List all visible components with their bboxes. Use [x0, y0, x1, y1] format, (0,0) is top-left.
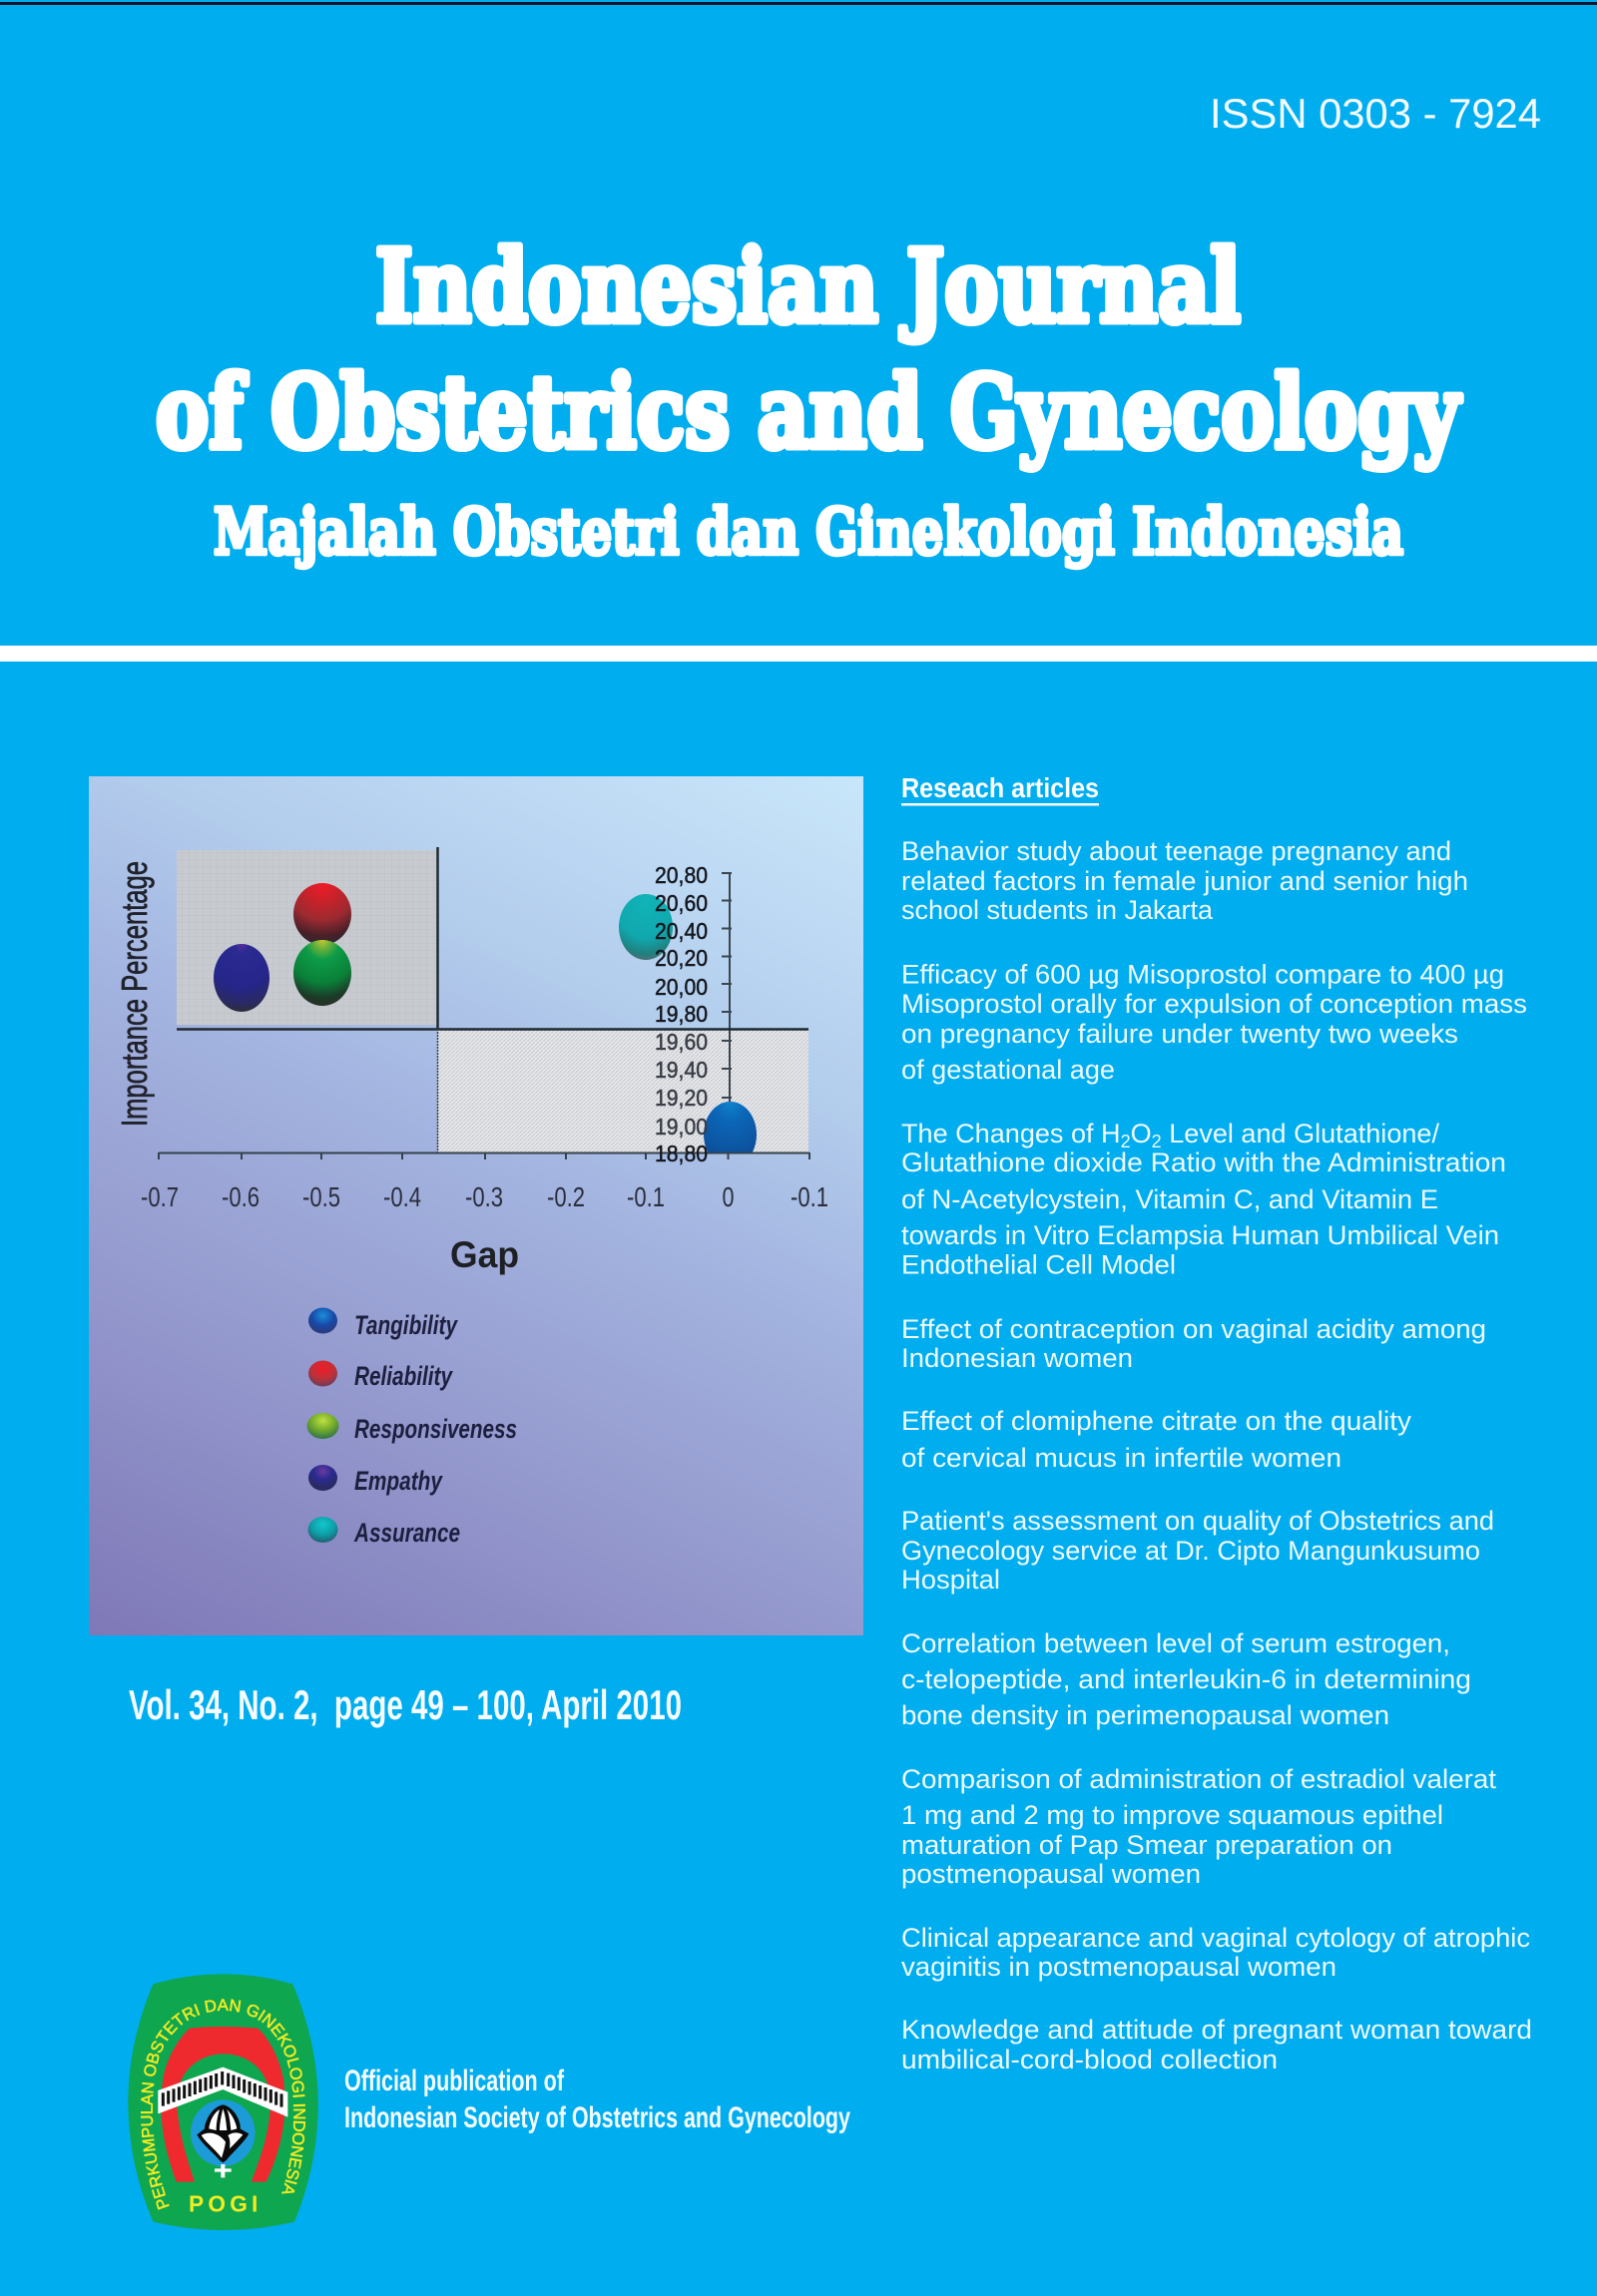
- x axis labels: -0.6: [222, 1181, 260, 1212]
- logo roof: [158, 2067, 287, 2117]
- article 6: Gynecology service at Dr. Cipto Mangunkusumo: [901, 1536, 1480, 1566]
- legend: assurance: Assurance: [353, 1518, 460, 1548]
- article 2: on pregnancy failure under twenty two weeks: [901, 1019, 1458, 1049]
- article 2: Efficacy of 600 µg Misoprostol compare to 400 µg: [901, 960, 1504, 990]
- y axis labels: [655, 862, 708, 1166]
- logo ring text: PERKUMPULAN OBSTETRI DAN GINEKOLOGI INDONESIA: [141, 1999, 305, 2210]
- legend: responsiveness: [307, 1413, 517, 1444]
- article 9: [901, 1923, 1530, 1982]
- article 7: [901, 1628, 1471, 1730]
- article 8: maturation of Pap Smear preparation on: [901, 1830, 1392, 1860]
- legend: assurance: [307, 1517, 460, 1548]
- logo POGI text: POGI: [189, 2191, 258, 2217]
- x axis labels: -0.5: [302, 1181, 340, 1212]
- article 5: of cervical mucus in infertile women: [901, 1443, 1341, 1473]
- x axis labels: -0.1: [791, 1181, 828, 1212]
- article 1: related factors in female junior and senior high: [901, 866, 1468, 896]
- article 5: [901, 1406, 1412, 1473]
- article list: [901, 772, 1532, 2074]
- x axis labels: -0.7: [141, 1181, 179, 1212]
- x axis: [159, 1152, 809, 1159]
- article 9: vaginitis in postmenopausal women: [901, 1952, 1336, 1982]
- article 1: school students in Jakarta: [901, 895, 1214, 925]
- legend: tangibility: [308, 1307, 459, 1340]
- article 1: Behavior study about teenage pregnancy and: [901, 836, 1451, 866]
- y axis labels: 19,60: [655, 1029, 708, 1055]
- x axis labels: -0.3: [465, 1181, 503, 1212]
- title line 1: Indonesian Journal: [375, 228, 1241, 345]
- article 8: [901, 1764, 1497, 1889]
- article 8: 1 mg and 2 mg to improve squamous epithel: [901, 1800, 1443, 1830]
- quadrant: upper left: [177, 850, 437, 1025]
- article 4: [901, 1314, 1486, 1373]
- y axis: [722, 873, 732, 1153]
- logo shield: [128, 1974, 318, 2230]
- x axis labels: [141, 1181, 828, 1212]
- sphere: tangibility: [704, 1102, 757, 1151]
- article 6: Hospital: [901, 1565, 1000, 1595]
- x axis title: Gap: [450, 1234, 519, 1275]
- article 3: Glutathione dioxide Ratio with the Administration: [901, 1148, 1506, 1177]
- article 8: Comparison of administration of estradiol valerat: [901, 1764, 1497, 1794]
- x axis labels: -0.1: [627, 1181, 665, 1212]
- y axis labels: 20,40: [655, 918, 708, 944]
- article 7: Correlation between level of serum estrogen,: [901, 1628, 1450, 1658]
- white divider band: [0, 646, 1597, 662]
- x axis labels: 0: [723, 1181, 735, 1212]
- article 3: O: [1131, 1119, 1152, 1148]
- logo: POGI emblem: [128, 1974, 318, 2230]
- article 5: Effect of clomiphene citrate on the quality: [901, 1406, 1412, 1436]
- y axis labels: 18,80: [655, 1141, 708, 1166]
- legend: empathy: Empathy: [354, 1466, 444, 1496]
- legend: [307, 1307, 517, 1548]
- y axis labels: 20,20: [655, 945, 708, 971]
- article 7: bone density in perimenopausal women: [901, 1700, 1389, 1730]
- legend: empathy: [308, 1465, 444, 1496]
- sphere: responsiveness: [293, 940, 351, 1006]
- article 7: c-telopeptide, and interleukin-6 in determining: [901, 1664, 1471, 1694]
- sphere: assurance: [619, 894, 673, 960]
- article 3: Level and Glutathione/: [1162, 1119, 1439, 1148]
- y axis labels: 19,40: [655, 1057, 708, 1083]
- y axis title: Importance Percentage: [114, 861, 155, 1127]
- y axis labels: 20,00: [655, 974, 708, 1000]
- article 3: 2: [1121, 1132, 1131, 1151]
- article 3: [901, 1119, 1506, 1279]
- y axis labels: 20,80: [655, 862, 708, 888]
- article 6: [901, 1506, 1494, 1595]
- article 3: of N-Acetylcystein, Vitamin C, and Vitamin E: [901, 1184, 1438, 1214]
- article 6: Patient's assessment on quality of Obstetrics and: [901, 1506, 1494, 1536]
- article 3: towards in Vitro Eclampsia Human Umbilical Vein: [901, 1220, 1499, 1250]
- y axis labels: 19,00: [655, 1114, 708, 1140]
- ISSN number: ISSN 0303 - 7924: [1210, 90, 1541, 137]
- quadrant: lower right: [438, 1031, 808, 1152]
- y axis labels: 20,60: [655, 890, 708, 916]
- sphere: empathy: [214, 944, 269, 1012]
- legend: responsiveness: Responsiveness: [354, 1414, 517, 1444]
- y axis labels: 19,80: [655, 1001, 708, 1027]
- article 2: [901, 960, 1527, 1085]
- article 9: Clinical appearance and vaginal cytology of atrophic: [901, 1923, 1530, 1953]
- publisher text: Indonesian Society of Obstetrics and Gynecology: [344, 2101, 850, 2134]
- legend: tangibility: Tangibility: [354, 1310, 459, 1340]
- article 3: Endothelial Cell Model: [901, 1249, 1176, 1279]
- article 10: Knowledge and attitude of pregnant woman toward: [901, 2015, 1532, 2045]
- top edge line: [0, 2, 1597, 5]
- y axis labels: 19,20: [655, 1085, 708, 1111]
- article 2: Misoprostol orally for expulsion of conception mass: [901, 989, 1527, 1019]
- article 2: of gestational age: [901, 1055, 1115, 1085]
- publisher text: Official publication of: [344, 2065, 565, 2097]
- article 10: [901, 2015, 1532, 2074]
- logo horseshoe: [161, 2027, 284, 2182]
- sphere: reliability: [293, 883, 351, 945]
- logo flower: [197, 2104, 249, 2162]
- logo blue circle: [191, 2099, 256, 2166]
- x axis labels: -0.4: [383, 1181, 421, 1212]
- article 3: The Changes of H: [901, 1119, 1120, 1148]
- x axis labels: -0.2: [547, 1181, 585, 1212]
- article 10: umbilical-cord-blood collection: [901, 2045, 1278, 2074]
- panel background: [89, 776, 863, 1635]
- article 8: postmenopausal women: [901, 1859, 1201, 1889]
- heading: research articles: Reseach articles: [901, 772, 1099, 803]
- article 4: Indonesian women: [901, 1343, 1133, 1373]
- logo cross: [215, 2164, 232, 2177]
- legend: reliability: [308, 1361, 454, 1391]
- article 3: 2: [1152, 1132, 1162, 1151]
- publisher text: [344, 2065, 850, 2134]
- panel: gap chart: [89, 776, 863, 1635]
- article 4: Effect of contraception on vaginal acidity among: [901, 1314, 1486, 1344]
- legend: reliability: Reliability: [354, 1361, 454, 1391]
- article 1: [901, 836, 1468, 925]
- volume line: Vol. 34, No. 2, page 49 – 100, April 2010: [129, 1681, 682, 1728]
- title: [156, 228, 1461, 570]
- quadrant lines: [177, 847, 808, 1153]
